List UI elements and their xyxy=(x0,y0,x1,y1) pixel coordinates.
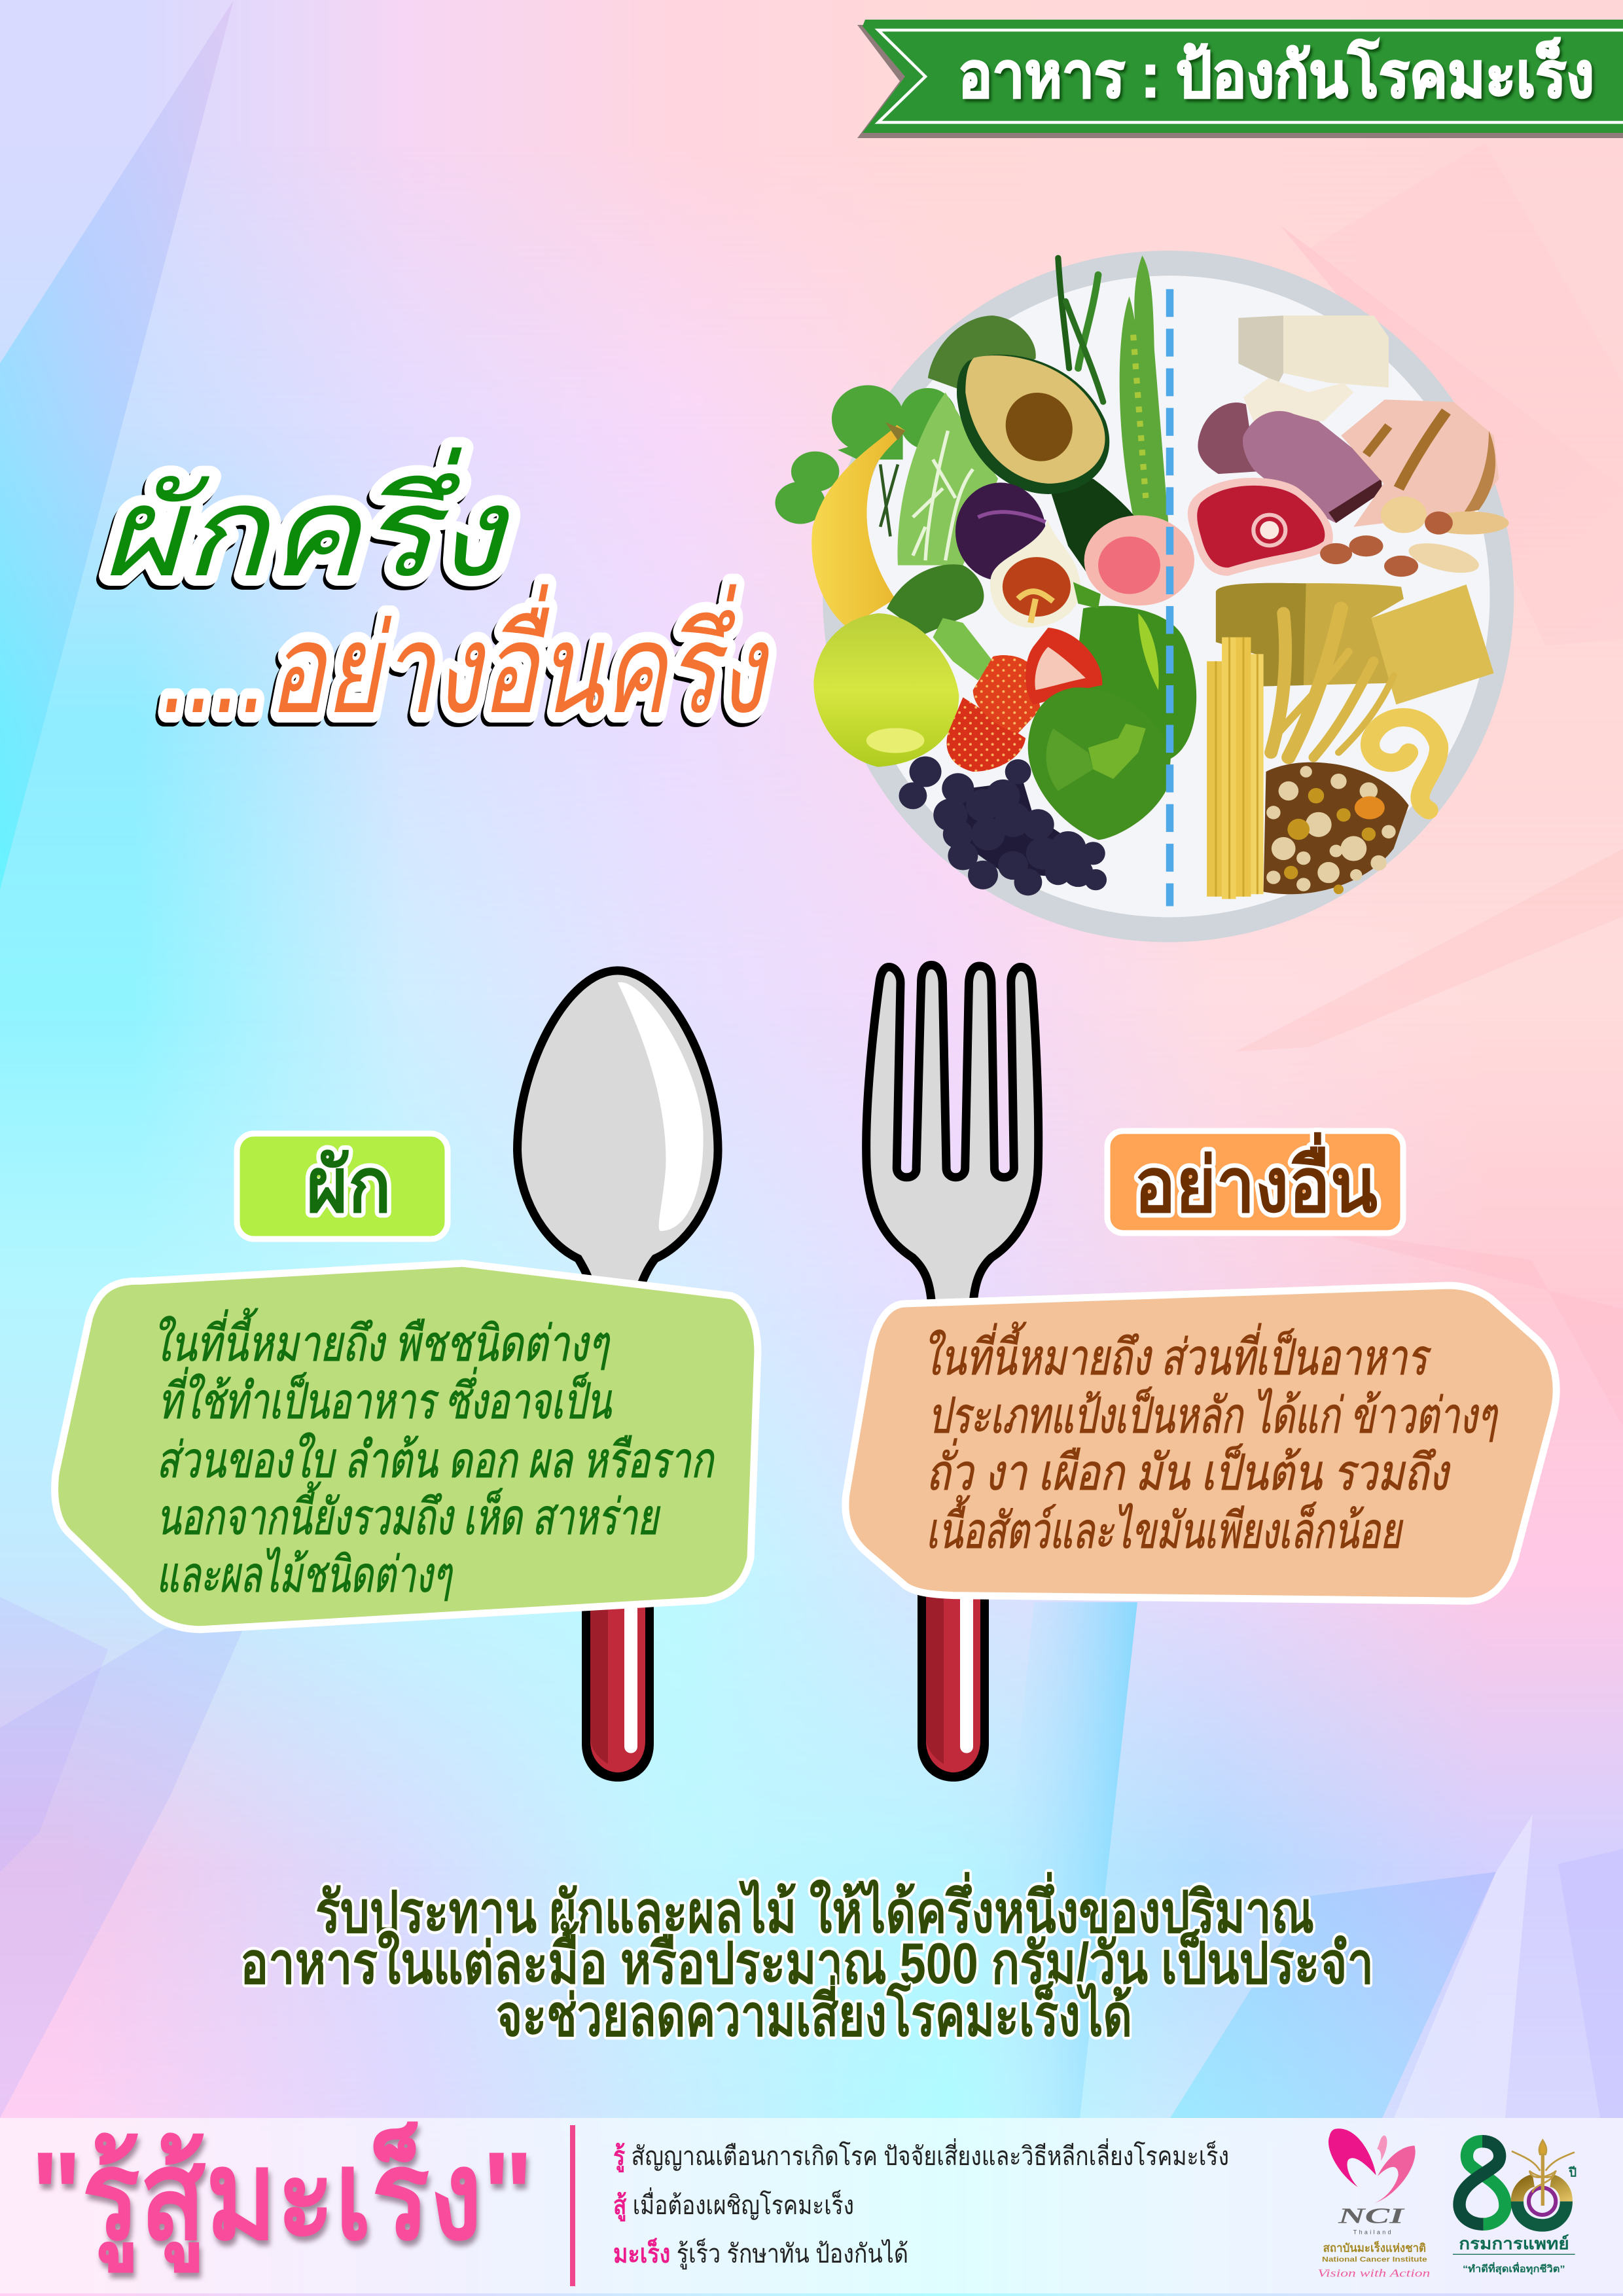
herb leaves xyxy=(775,385,957,524)
pepper front xyxy=(1028,687,1171,840)
other foods definition text: ในที่นี้หมายถึง ส่วนที่เป็นอาหาร xyxy=(922,1321,1431,1386)
other foods definition text: ถั่ว งา เผือก มัน เป็นต้น รวมถึง xyxy=(926,1438,1451,1501)
vegetables definition text: ในที่นี้หมายถึง พืชชนิดต่างๆ xyxy=(152,1308,610,1372)
scallions xyxy=(1058,258,1103,402)
footer line 3: มะเร็ง รู้เร็ว รักษาทัน ป้องกันได้ xyxy=(613,2237,908,2269)
tofu block xyxy=(1238,315,1389,421)
footer divider xyxy=(570,2125,575,2286)
department name: กรมการแพทย์ xyxy=(1459,2234,1569,2253)
ham slices xyxy=(1341,399,1499,527)
purple ring xyxy=(1529,2188,1556,2215)
broccoli leaf xyxy=(887,564,984,635)
strawberries xyxy=(947,628,1102,772)
lettuce xyxy=(880,392,998,565)
NCI letters: NCI xyxy=(1337,2204,1405,2229)
institute English name: National Cancer Institute xyxy=(1322,2255,1427,2263)
orange callout shape xyxy=(846,1285,1556,1601)
fork handle xyxy=(918,1571,989,1782)
grapes xyxy=(899,757,1107,895)
wheat xyxy=(1271,609,1394,757)
pasta bundle xyxy=(1207,637,1264,899)
heading line 2: ....อย่างอื่นครึ่ง xyxy=(162,584,770,739)
vegetables definition text: ที่ใช้ทำเป็นอาหาร ซึ่งอาจเป็น xyxy=(158,1367,612,1429)
footer line 1: รู้ สัญญาณเตือนการเกิดโรค ปัจจัยเสี่ยงและวิธีหลีกเลี่ยงโรคมะเร็ง xyxy=(613,2138,1229,2172)
green callout shape xyxy=(55,1263,758,1630)
spoon handle xyxy=(582,1571,654,1782)
green sprig xyxy=(933,618,993,681)
vegetables definition text xyxy=(152,1308,715,1603)
vision tagline: Vision with Action xyxy=(1317,2267,1430,2279)
footer band xyxy=(0,2118,1623,2293)
asparagus xyxy=(1120,255,1168,522)
label: vegetables xyxy=(237,1134,448,1239)
other foods definition text xyxy=(922,1321,1498,1559)
spoon xyxy=(518,971,718,1782)
zero ring lower xyxy=(1517,2201,1566,2225)
blue dashed divider xyxy=(1165,289,1175,906)
label text: vegetables: ผัก xyxy=(306,1143,391,1228)
top category banner xyxy=(857,20,1623,138)
caduceus emblem xyxy=(1512,2140,1575,2206)
vegetables definition text: นอกจากนี้ยังรวมถึง เห็ด สาหร่าย xyxy=(156,1481,660,1545)
plum xyxy=(955,482,1046,581)
advice text block: จะช่วยลดความเสี่ยงโรคมะเร็งได้ xyxy=(496,1975,1132,2048)
fig xyxy=(990,520,1080,628)
nuts xyxy=(1320,497,1509,579)
guava xyxy=(1084,515,1194,605)
label: other xyxy=(1107,1131,1403,1233)
red steak xyxy=(1188,478,1333,576)
food plate illustration xyxy=(775,251,1514,942)
years label: ปี xyxy=(1568,2165,1577,2179)
logo: Department of Medical Services 80 years xyxy=(1453,2140,1577,2275)
vegetables definition text: และผลไม้ชนิดต่างๆ xyxy=(156,1547,453,1603)
department motto: “ทำดีที่สุดเพื่อทุกชีวิต” xyxy=(1463,2262,1565,2275)
avocado xyxy=(957,355,1138,575)
fork head xyxy=(866,965,1039,1313)
sliced meat xyxy=(1198,403,1382,523)
advice text block: รับประทาน ผักและผลไม้ ให้ได้ครึ่งหนึ่งของปริมาณ xyxy=(315,1872,1314,1945)
pretzel snack xyxy=(1370,717,1439,810)
loaf shadow side xyxy=(1216,583,1306,686)
fork xyxy=(866,965,1039,1782)
vegetables definition text: ส่วนของใบ ลำต้น ดอก ผล หรือราก xyxy=(156,1432,715,1488)
heading line 1: ผักครึ่ง xyxy=(101,447,511,602)
other foods definition text: เนื้อสัตว์และไขมันเพียงเล็กน้อย xyxy=(926,1495,1403,1559)
panel: vegetables definition xyxy=(55,1263,758,1630)
granola xyxy=(1264,762,1409,894)
panel: other foods definition xyxy=(846,1285,1556,1601)
bread loaf xyxy=(1216,583,1404,686)
peppers back xyxy=(1073,582,1196,760)
advice text block xyxy=(240,1872,1374,2048)
plate disc xyxy=(823,251,1514,942)
label text: other: อย่างอื่น xyxy=(1134,1132,1378,1228)
cabbage leaf xyxy=(928,315,1036,392)
apple xyxy=(813,613,959,767)
advice text block: อาหารในแต่ละมื้อ หรือประมาณ 500 กรัม/วัน เป็นประจำ xyxy=(240,1921,1374,1996)
bread slice xyxy=(1371,584,1494,704)
butterfly mark xyxy=(1329,2128,1416,2203)
figure eight mark xyxy=(1459,2142,1505,2224)
banana xyxy=(812,422,905,628)
campaign slogan: "รู้สู้มะเร็ง" xyxy=(31,2121,533,2273)
footer line 2: สู้ เมื่อต้องเผชิญโรคมะเร็ง xyxy=(613,2187,854,2221)
institute Thai name: สถาบันมะเร็งแห่งชาติ xyxy=(1323,2240,1426,2255)
spoon bowl xyxy=(518,971,718,1293)
heading: half vegetables, half other xyxy=(101,447,770,739)
logo: National Cancer Institute xyxy=(1317,2128,1430,2279)
zero ring gold xyxy=(1517,2181,1566,2201)
Thailand word: Thailand xyxy=(1353,2229,1393,2235)
